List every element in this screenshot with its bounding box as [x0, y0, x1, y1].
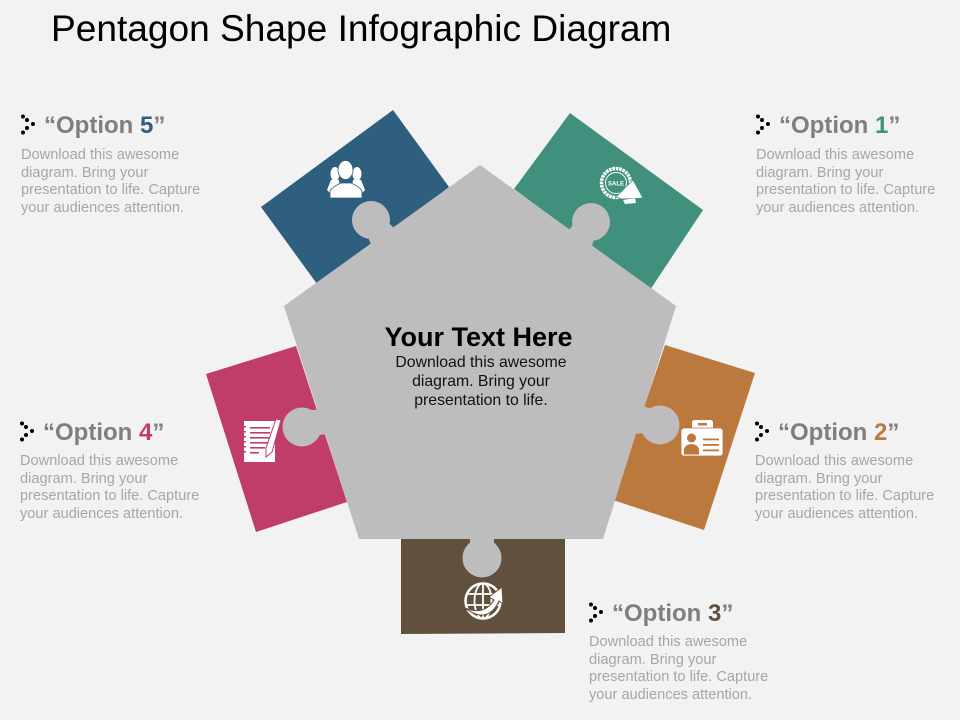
panel: option 5 tab [261, 110, 449, 288]
icon: people [327, 160, 365, 198]
callout: option 4: Download this awesome [20, 453, 178, 469]
callout: option 1 [756, 112, 935, 216]
center text: diagram. Bring your [412, 373, 550, 390]
title: Pentagon Shape Infographic Diagram [51, 7, 671, 49]
center text: Download this awesome [395, 354, 567, 371]
callout: option 5: “Option 5” [44, 112, 165, 139]
callout: option 2: diagram. Bring your [755, 471, 882, 487]
panel: option 3 tab [401, 536, 565, 634]
callout: option 1: your audiences attention. [756, 200, 919, 216]
callout: option 4: “Option 4” [43, 419, 164, 446]
callout: option 3 [589, 600, 768, 703]
callout: option 4: diagram. Bring your [20, 471, 147, 487]
callout: option 3: “Option 3” [612, 600, 733, 627]
callout: option 4: presentation to life. Capture [20, 488, 199, 504]
panel: option 4 tab [206, 346, 347, 532]
callout: option 5: your audiences attention. [21, 200, 184, 216]
center text: Your Text Here [384, 322, 573, 352]
icon: dots [589, 602, 603, 622]
callout: option 1: “Option 1” [779, 112, 900, 139]
callout: option 1: Download this awesome [756, 147, 914, 163]
center text: presentation to life. [414, 392, 548, 409]
callout: option 3: Download this awesome [589, 634, 747, 650]
panel: option 1 tab [514, 113, 703, 290]
icon: globe with arrow [465, 584, 503, 618]
callout: option 1: presentation to life. Capture [756, 182, 935, 198]
callout: option 5 [21, 112, 200, 216]
panel: option 2 tab [613, 345, 755, 530]
callout: option 4: your audiences attention. [20, 506, 183, 522]
callout: option 5: diagram. Bring your [21, 165, 148, 181]
icon: dots [20, 422, 34, 442]
callout: option 2: Download this awesome [755, 453, 913, 469]
icon: notepad and pen [244, 419, 281, 462]
callout: option 2: “Option 2” [778, 419, 899, 446]
icon: id card [681, 420, 723, 456]
callout: option 3: diagram. Bring your [589, 652, 716, 668]
icon: dots [21, 114, 35, 134]
central pentagon with puzzle knobs [282, 165, 680, 578]
callout: option 2 [755, 419, 934, 522]
callout: option 1: diagram. Bring your [756, 165, 883, 181]
callout: option 4 [20, 419, 199, 522]
callout: option 2: your audiences attention. [755, 506, 918, 522]
callout: option 3: your audiences attention. [589, 687, 752, 703]
callout: option 5: presentation to life. Capture [21, 182, 200, 198]
center text [384, 322, 573, 409]
callout: option 3: presentation to life. Capture [589, 669, 768, 685]
icon: sale badge and megaphone [602, 168, 643, 204]
callout: option 2: presentation to life. Capture [755, 488, 934, 504]
icon: dots [756, 114, 770, 134]
callout: option 5: Download this awesome [21, 147, 179, 163]
icon: dots [755, 422, 769, 442]
icon: sale badge and megaphone: SALE [608, 182, 624, 188]
